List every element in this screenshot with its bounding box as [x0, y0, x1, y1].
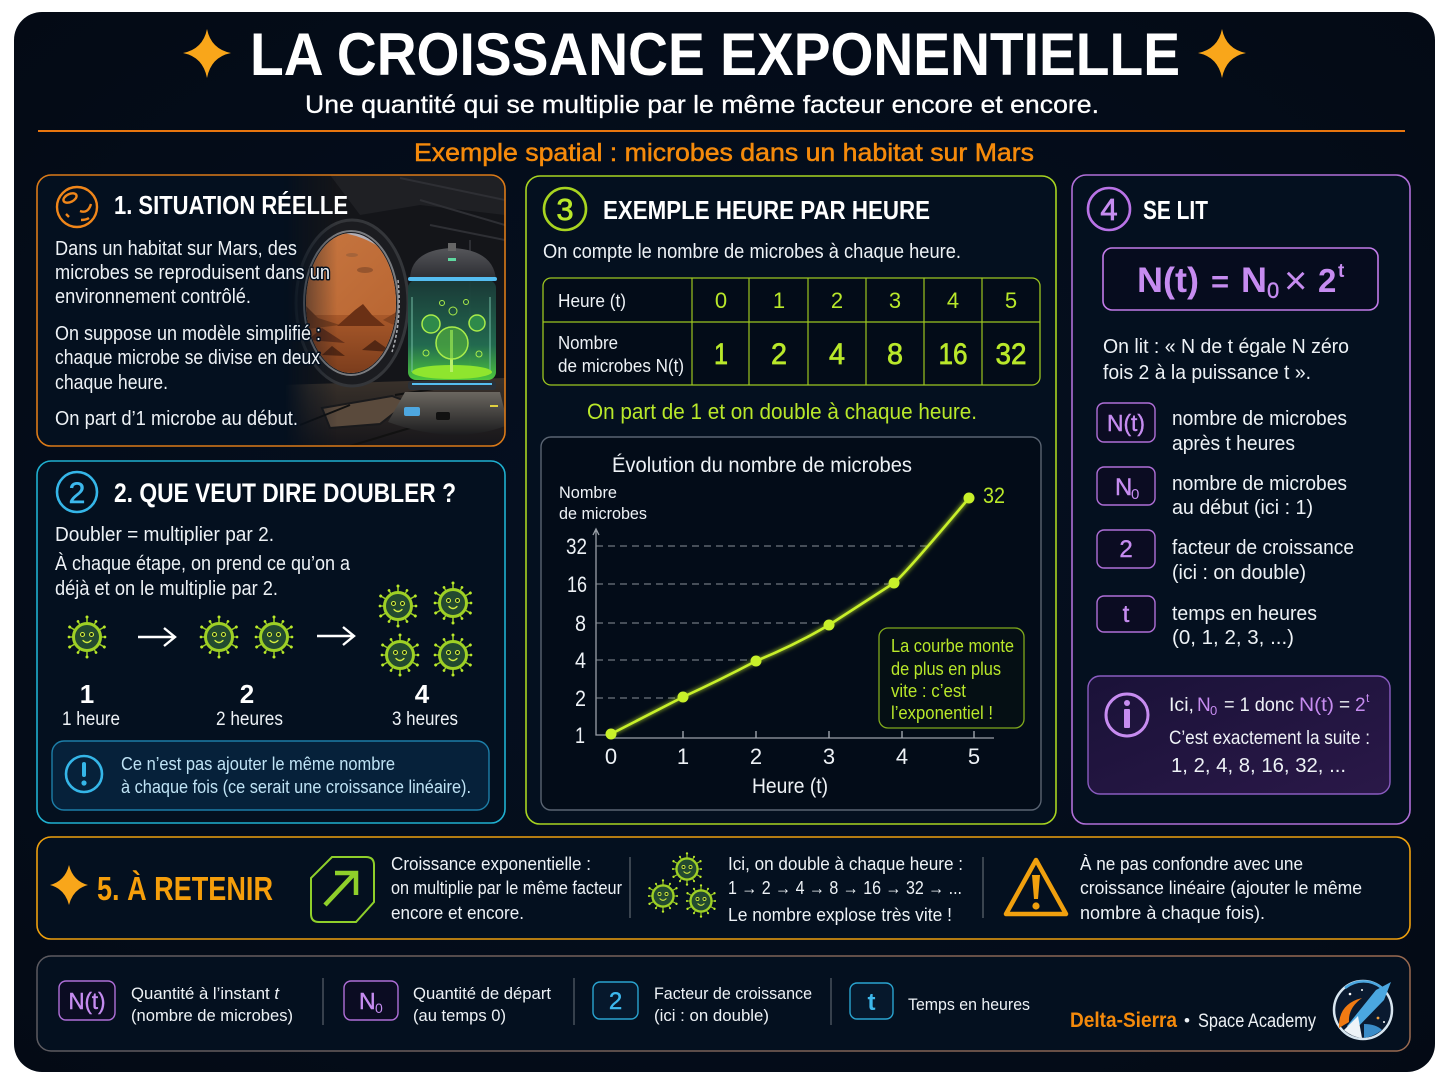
chart callout: de plus en plus	[891, 659, 1001, 679]
table: 0	[715, 288, 727, 313]
glossary: 2: Facteur de croissance	[654, 984, 812, 1003]
panel 3: heure par heure	[526, 176, 1056, 824]
legend: N(t)	[1097, 403, 1347, 455]
glossary: N0: 0	[375, 1000, 383, 1016]
info box: N	[1197, 695, 1211, 716]
legend: N0	[1097, 467, 1347, 519]
body text: Doubler = multiplier par 2.	[55, 524, 274, 546]
info box: =	[1339, 695, 1350, 716]
text: exponential growth	[391, 854, 622, 923]
glossary: 2: (ici : on double)	[654, 1006, 769, 1025]
icon: number 4	[1088, 188, 1130, 230]
chart callout: l’exponentiel !	[891, 703, 993, 723]
glossary: t	[850, 983, 1030, 1019]
body text	[55, 238, 330, 430]
icon: growth arrow	[311, 857, 374, 922]
callout: not linear: Ce n’est pas ajouter le même nombre	[121, 754, 395, 774]
body text	[55, 524, 351, 600]
chart: microbes over time: Nombre	[559, 483, 617, 502]
glossary: t: t	[868, 989, 876, 1016]
icon: left star	[183, 29, 231, 78]
legend: N0: au début (ici : 1)	[1172, 497, 1313, 519]
glossary: N0: (au temps 0)	[413, 1006, 506, 1025]
legend: N0: 0	[1131, 486, 1139, 503]
chart: microbes over time: Évolution du nombre de microbes	[612, 454, 912, 477]
formula: ×	[1284, 259, 1307, 303]
chart callout: vite : c’est	[891, 681, 966, 701]
icon: rocket logo	[1334, 981, 1392, 1039]
legend: N0: N	[1115, 474, 1132, 501]
icon: microbes	[648, 852, 716, 918]
icon: microbe planet	[57, 187, 97, 227]
chart: microbes over time: 0	[605, 744, 617, 769]
glossary: N(t): (nombre de microbes)	[131, 1006, 293, 1025]
heading: 2. QUE VEUT DIRE DOUBLER ?	[114, 478, 456, 508]
text: exponential growth: on multiplie par le même facteur	[391, 878, 622, 898]
info box: t	[1366, 691, 1370, 705]
intro text: On compte le nombre de microbes à chaque heure.	[543, 241, 961, 263]
brand	[1070, 1009, 1316, 1032]
formula: =	[1211, 264, 1229, 299]
info box: Ici,	[1169, 695, 1194, 716]
chart: microbes over time: de microbes	[559, 504, 647, 523]
info box: 0	[1210, 703, 1217, 718]
table: Nombre	[558, 333, 618, 353]
legend: 2: 2	[1119, 536, 1133, 563]
glossary: N(t): Quantité à l’instant t	[131, 984, 280, 1003]
chart callout	[879, 628, 1024, 728]
callout: not linear: à chaque fois (ce serait une croissance linéaire).	[121, 777, 471, 797]
table: 3	[889, 288, 901, 313]
legend: 2	[1097, 530, 1354, 584]
info box: = 1 donc	[1224, 695, 1294, 716]
panel 4: se lit: fois 2 à la puissance t ».	[1103, 362, 1311, 384]
info box: C’est exactement la suite :	[1169, 728, 1370, 749]
legend: N0: nombre de microbes	[1172, 473, 1347, 495]
subtitle: Une quantité qui se multiplie par le même facteur encore et encore.	[305, 91, 1099, 119]
info box: 1, 2, 4, 8, 16, 32, ...	[1171, 755, 1346, 777]
callout: not linear	[52, 741, 489, 810]
glossary: N(t): N(t)	[68, 988, 106, 1014]
text: warning	[1080, 854, 1362, 923]
panel 1: situation réelle	[37, 175, 510, 447]
chart: microbes over time: 4	[575, 648, 586, 673]
heading: EXEMPLE HEURE PAR HEURE	[603, 195, 930, 225]
legend: t: (0, 1, 2, 3, ...)	[1172, 627, 1294, 649]
brand: •	[1184, 1011, 1190, 1030]
chart callout: La courbe monte	[891, 636, 1014, 656]
legend: t: temps en heures	[1172, 603, 1317, 625]
legend: 2: (ici : on double)	[1172, 562, 1306, 584]
body text: On suppose un modèle simplifié :	[55, 323, 321, 345]
brand: Space Academy	[1198, 1011, 1316, 1032]
formula: N	[1241, 261, 1267, 300]
body text: déjà et on le multiplie par 2.	[55, 578, 278, 600]
text: exponential growth: encore et encore.	[391, 903, 524, 923]
table: 4	[947, 288, 959, 313]
chart: microbes over time: 1	[677, 744, 689, 769]
chart: microbes over time	[541, 437, 1041, 810]
panel 4: se lit	[1072, 175, 1410, 824]
brand: Delta-Sierra	[1070, 1009, 1177, 1032]
diagram: doubling microbes: 4	[415, 679, 430, 709]
body text: Dans un habitat sur Mars, des	[55, 238, 297, 260]
table: 8	[887, 338, 903, 371]
text: exponential growth: Croissance exponentielle :	[391, 854, 591, 874]
formula	[1103, 248, 1378, 310]
icon: number 3: 3	[556, 192, 574, 227]
text: doubling sequence	[728, 854, 963, 925]
icon: number 3	[544, 188, 586, 230]
info box: 2	[1355, 695, 1366, 716]
text: warning: nombre à chaque fois).	[1080, 903, 1265, 923]
body text: chaque heure.	[55, 372, 168, 394]
panel 2: doubler	[37, 461, 505, 823]
diagram: doubling microbes	[62, 582, 472, 730]
icon: star	[50, 865, 88, 905]
chart: microbes over time: 5	[968, 744, 980, 769]
table: 1	[714, 338, 728, 371]
chart: microbes over time: 2	[575, 686, 586, 711]
title: LA CROISSANCE EXPONENTIELLE	[250, 21, 1180, 88]
diagram: doubling microbes: 1	[80, 679, 94, 709]
glossary: N0: Quantité de départ	[413, 984, 551, 1003]
glossary: N0: N	[359, 988, 376, 1014]
glossary: t: Temps en heures	[908, 995, 1030, 1014]
info box	[1088, 676, 1390, 794]
heading: 5. À RETENIR	[97, 870, 273, 907]
text: warning: À ne pas confondre avec une	[1080, 854, 1303, 874]
glossary: N(t)	[59, 981, 293, 1025]
body text: chaque microbe se divise en deux	[55, 347, 320, 369]
legend: t: t	[1123, 601, 1130, 628]
text: doubling sequence: Le nombre explose très vite !	[728, 905, 952, 925]
table: 32	[996, 338, 1026, 371]
body text: environnement contrôlé.	[55, 286, 251, 308]
table: de microbes N(t)	[558, 356, 684, 376]
icon: warning	[1006, 860, 1066, 914]
legend: N(t): N(t)	[1107, 410, 1145, 436]
legend: N(t): après t heures	[1172, 433, 1295, 455]
chart: microbes over time: 2	[750, 744, 762, 769]
chart: microbes over time: 3	[823, 744, 835, 769]
chart: microbes over time: 8	[575, 611, 586, 636]
table: 4	[829, 338, 845, 371]
icon: number 2: 2	[69, 477, 85, 510]
formula: 0	[1267, 278, 1279, 303]
diagram: doubling microbes: 3 heures	[392, 709, 458, 730]
icon: number 4: 4	[1100, 192, 1118, 227]
table caption: On part de 1 et on double à chaque heure.	[587, 399, 977, 424]
panel 5: à retenir	[37, 837, 1410, 939]
glossary: 2	[593, 982, 812, 1025]
table	[543, 278, 1040, 385]
body text: On part d’1 microbe au début.	[55, 408, 298, 430]
table: 2	[771, 338, 787, 371]
formula: N(t)	[1137, 261, 1199, 300]
chart: microbes over time: Heure (t)	[752, 775, 828, 798]
glossary: N0	[344, 981, 551, 1025]
chart: microbes over time: 32	[566, 534, 587, 559]
chart: microbes over time: 4	[896, 744, 908, 769]
heading: SE LIT	[1143, 195, 1208, 225]
chart: microbes over time: 32	[983, 483, 1005, 508]
table: 16	[938, 338, 968, 371]
diagram: doubling microbes: 2 heures	[216, 709, 283, 730]
icon: right star	[1198, 29, 1246, 78]
text: doubling sequence: Ici, on double à chaque heure :	[728, 854, 963, 874]
body text: microbes se reproduisent dans un	[55, 262, 330, 284]
illustration: Mars habitat with bioreactor	[292, 176, 504, 446]
table: Heure (t)	[558, 291, 626, 311]
info box: N(t)	[1299, 695, 1334, 716]
formula: t	[1338, 261, 1345, 282]
table: 5	[1005, 288, 1017, 313]
glossary: 2: 2	[609, 988, 622, 1015]
legend: 2: facteur de croissance	[1172, 537, 1354, 559]
icon: number 2	[57, 472, 97, 512]
example heading: Exemple spatial : microbes dans un habitat sur Mars	[414, 139, 1034, 167]
text: warning: croissance linéaire (ajouter le même	[1080, 878, 1362, 898]
panel: glossary footer	[37, 956, 1410, 1051]
legend: N(t): nombre de microbes	[1172, 408, 1347, 430]
heading: 1. SITUATION RÉELLE	[114, 190, 348, 220]
title banner	[183, 21, 1246, 119]
formula: 2	[1318, 262, 1336, 299]
legend: t	[1097, 596, 1317, 649]
chart: microbes over time: 16	[567, 572, 587, 597]
body text: À chaque étape, on prend ce qu’on a	[55, 552, 351, 575]
diagram: doubling microbes: 1 heure	[62, 709, 120, 730]
text: doubling sequence: 1 → 2 → 4 → 8 → 16 → 32 → ...	[728, 878, 962, 898]
table: 1	[773, 288, 785, 313]
reading text: On lit : « N de t égale N zéro	[1103, 336, 1349, 358]
chart: microbes over time: 1	[575, 723, 585, 748]
diagram: doubling microbes: 2	[240, 679, 254, 709]
table: 2	[831, 288, 843, 313]
